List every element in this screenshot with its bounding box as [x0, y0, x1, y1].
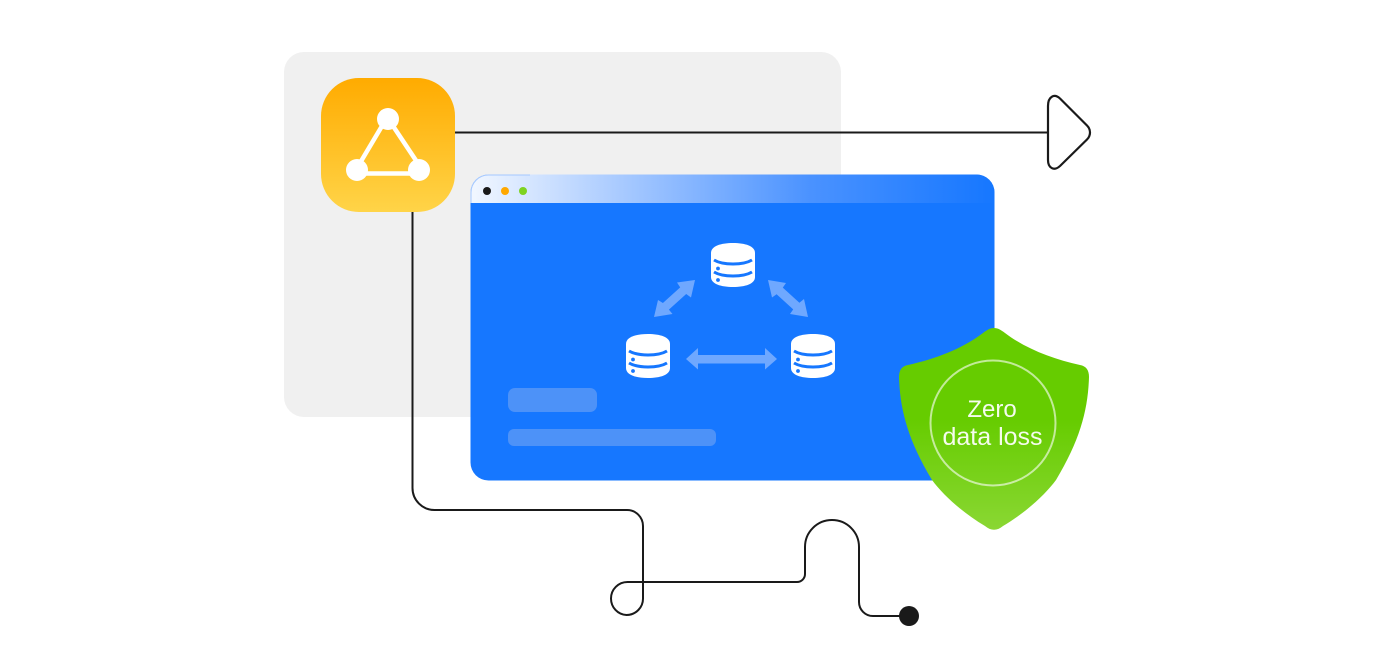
- icon: database left: [626, 334, 670, 378]
- panel: blue browser window: [470, 174, 994, 480]
- window control dots: [483, 187, 527, 195]
- badge: green shield: [899, 328, 1089, 530]
- window title bar: [470, 174, 994, 203]
- icon: database right: [791, 334, 835, 378]
- arrow: bidirectional bottom: [686, 348, 777, 370]
- icon: orange app tile with network triangle: [321, 78, 455, 212]
- placeholder bar: short: [508, 388, 597, 412]
- connector: line from icon to arrow: [455, 132, 1048, 134]
- badge text: data loss: [942, 423, 1043, 451]
- shield inner ring: [930, 360, 1056, 486]
- panel: grey background card: [284, 52, 841, 417]
- badge text: Zero: [967, 396, 1017, 423]
- icon: outlined triangle arrow: [1048, 96, 1090, 169]
- icon: database top: [711, 243, 755, 287]
- placeholder bar: long: [508, 429, 716, 446]
- window top edge highlight: [471, 175, 530, 203]
- badge text: [942, 396, 1043, 451]
- connector: winding line from icon to end dot: [412, 212, 919, 626]
- arrow: bidirectional right diagonal: [768, 280, 808, 317]
- end dot: [899, 606, 919, 626]
- arrow: bidirectional left diagonal: [654, 280, 695, 317]
